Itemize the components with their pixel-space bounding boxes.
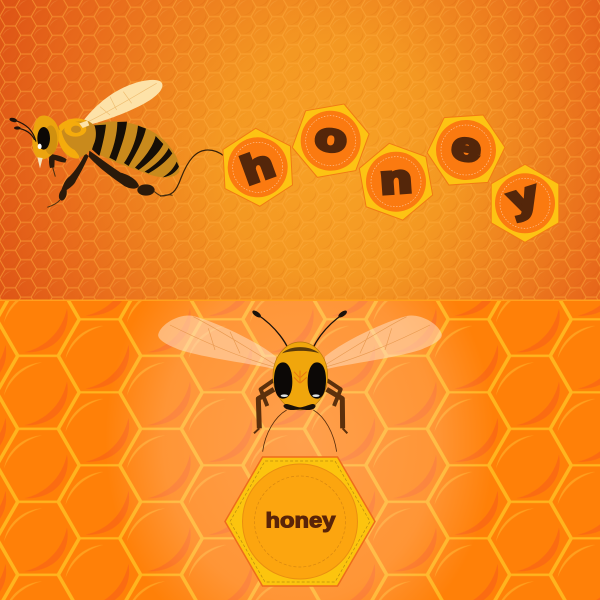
hanging threads — [263, 410, 337, 452]
badge: y: y — [503, 173, 543, 223]
badge: o — [286, 92, 376, 189]
panel: bottom honeycomb background — [0, 300, 600, 600]
badge: h — [222, 127, 293, 208]
honey label hexagon — [225, 457, 375, 586]
badge: y — [491, 164, 559, 242]
badge: o: o — [313, 114, 349, 161]
bee head — [32, 116, 59, 168]
badge: h: h — [236, 142, 279, 193]
bee thorax — [57, 118, 96, 159]
head — [273, 342, 328, 410]
legs — [254, 380, 347, 433]
thread from flying bee to letters — [160, 150, 224, 196]
left wing — [158, 316, 276, 369]
bee antennae — [9, 117, 36, 142]
label text: honey — [266, 510, 336, 532]
right wing — [325, 316, 442, 369]
bee wing — [80, 80, 162, 127]
panel: top honeycomb background — [0, 0, 600, 300]
icon: hanging bee — [158, 309, 442, 452]
bee abdomen — [89, 121, 180, 177]
badge: e — [419, 100, 513, 200]
icon: flying bee — [9, 80, 180, 207]
badge: n: n — [379, 156, 413, 202]
bee legs — [47, 151, 173, 207]
badge: n — [356, 137, 436, 226]
antennae — [251, 309, 348, 363]
badge: e: e — [449, 123, 484, 171]
